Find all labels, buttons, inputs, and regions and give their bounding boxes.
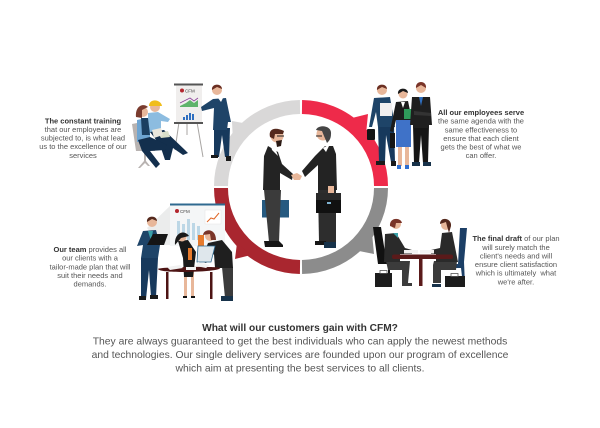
text block: our team: tailor-made plan that will: [50, 262, 131, 271]
bottom text block: [92, 323, 509, 374]
meeting table: [158, 262, 220, 299]
text block: final draft: [472, 234, 560, 286]
bottom paragraph: [92, 336, 509, 374]
central handshake figures: [262, 126, 341, 248]
text block: constant training: us to the excellence of our: [39, 142, 127, 151]
ring segment: dark gray: [302, 188, 381, 267]
text block: constant training: that our employees are: [45, 125, 121, 134]
monitor: [197, 246, 215, 262]
text block: all our employees: ensure that each client: [443, 134, 520, 143]
text block: all our employees: [438, 108, 524, 160]
presenter: [201, 85, 231, 161]
text block: constant training: [39, 116, 127, 160]
text block: our team: Our team provides all: [54, 245, 127, 254]
presentation screen: CFM: [180, 209, 190, 214]
illustration: training session: [132, 84, 231, 168]
seated man with hard hat: [148, 100, 188, 160]
text block: our team: [50, 245, 131, 289]
bottom paragraph: which aim at presenting the best services to all clients.: [175, 364, 424, 374]
text block: final draft: The final draft of our plan: [472, 234, 560, 243]
text block: final draft: ensure client satisfaction: [475, 260, 557, 269]
man with crossed arms: [410, 82, 432, 166]
text block: final draft: which is ultimately what: [475, 269, 557, 278]
bottom paragraph: and technologies. Our single delivery services are founded upon our program of excellence: [92, 350, 509, 361]
bottom paragraph: They are always guaranteed to get the best individuals who can apply the newest methods: [93, 336, 507, 348]
illustration: team planning: [137, 204, 233, 301]
left man seated: [384, 219, 412, 286]
text block: final draft: client's needs and will: [480, 251, 552, 260]
text block: our team: demands.: [74, 280, 106, 289]
handshake: [291, 173, 302, 180]
man with documents: [367, 85, 396, 166]
right chair: [449, 228, 467, 285]
man with laptop: [137, 217, 168, 300]
illustration: three employees: [367, 82, 432, 169]
text block: all our employees: the same agenda with the: [438, 117, 524, 126]
man bending over table: [201, 230, 233, 301]
ring segment: dark red: [221, 188, 300, 267]
woman in blue skirt: [390, 89, 412, 169]
woman leaning: [175, 232, 196, 298]
chair: [132, 123, 155, 168]
text block: all our employees: All our employees serve: [438, 108, 524, 117]
seated woman: [136, 105, 167, 168]
right businessman: [302, 126, 341, 248]
text block: constant training: The constant training: [45, 116, 122, 126]
text block: our team: suit their needs and: [57, 271, 123, 280]
briefcases: [375, 270, 465, 287]
text block: final draft: will surely match the: [481, 243, 550, 252]
text block: constant training: subjected to, is what lead: [41, 134, 125, 143]
right man seated: [431, 219, 458, 287]
text block: all our employees: gets the best of what we: [441, 143, 521, 152]
ring diagram: [221, 107, 381, 267]
ring segment: light gray: [221, 107, 300, 186]
left chair: [373, 227, 396, 285]
left businessman: [262, 129, 293, 247]
text block: constant training: services: [69, 151, 97, 160]
bottom heading: What will our customers gain with CFM?: [202, 323, 398, 334]
table: [392, 250, 453, 286]
flipchart: CFM: [185, 88, 195, 94]
illustration: client meeting: [373, 219, 467, 287]
ring segment: bright red: [302, 107, 381, 186]
text block: final draft: we're after.: [497, 277, 534, 286]
text block: all our employees: same effectiveness to: [445, 125, 517, 134]
text block: our team: our clients with a: [62, 254, 119, 263]
text block: all our employees: can offer.: [466, 151, 496, 160]
